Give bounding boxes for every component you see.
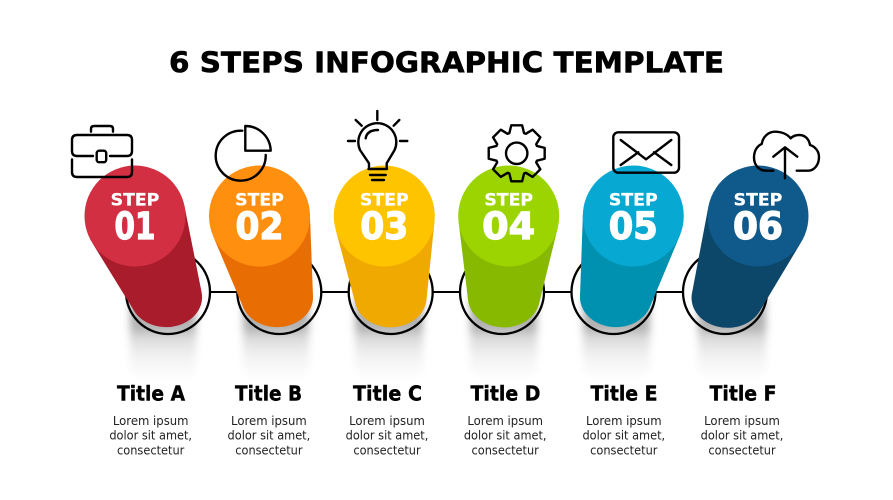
cylinder top 6: [708, 166, 808, 266]
icon: light bulb: [348, 111, 407, 180]
description E: consectetur: [590, 442, 658, 458]
description D: dolor sit amet,: [464, 428, 547, 442]
title F: Title F: [710, 382, 776, 406]
description C: [346, 413, 428, 458]
description C: consectetur: [353, 442, 421, 458]
title A: Title A: [117, 382, 185, 406]
ring 6: [683, 250, 767, 334]
description B: [228, 413, 310, 458]
shadow 1: [130, 290, 196, 380]
ring 2: [237, 250, 321, 334]
description F: Lorem ipsum: [704, 413, 780, 428]
icon: gear: [489, 125, 545, 181]
cylinder top 5: [583, 166, 684, 266]
description A: consectetur: [117, 442, 185, 458]
step 2: [209, 126, 321, 458]
description D: [464, 413, 547, 458]
cylinder body 5: [580, 214, 680, 327]
description B: dolor sit amet,: [228, 428, 310, 442]
shadow 3: [355, 290, 423, 380]
description E: Lorem ipsum: [586, 413, 662, 428]
step number 5: 05: [609, 205, 658, 248]
icon: envelope: [613, 132, 679, 173]
ring 3: [349, 250, 433, 334]
step number 3: 03: [360, 205, 408, 248]
cylinder top 2: [209, 166, 310, 266]
cylinder top 4: [458, 166, 559, 266]
title B: Title B: [235, 382, 302, 406]
description F: consectetur: [708, 442, 776, 458]
step label 5: STEP: [609, 191, 658, 210]
ring 4: [460, 250, 544, 334]
cylinder body 4: [459, 223, 558, 327]
description C: Lorem ipsum: [349, 413, 425, 428]
icon: pie chart: [216, 126, 271, 181]
step label 6: STEP: [734, 191, 782, 210]
description B: Lorem ipsum: [231, 413, 307, 428]
description E: dolor sit amet,: [582, 428, 665, 442]
step number 2: 02: [236, 205, 284, 248]
step label 4: STEP: [484, 191, 533, 210]
step number 6: 06: [733, 205, 783, 248]
description A: Lorem ipsum: [113, 413, 189, 428]
cylinder body 2: [213, 214, 313, 327]
shadow 5: [583, 290, 650, 380]
step number 4: 04: [482, 205, 535, 248]
cylinder body 6: [692, 206, 801, 328]
icon: briefcase: [72, 126, 132, 177]
shadow 4: [470, 290, 537, 380]
step 5: [572, 132, 684, 458]
title D: Title D: [470, 382, 540, 406]
description A: dolor sit amet,: [109, 428, 192, 442]
description B: consectetur: [235, 442, 303, 458]
step 3: [334, 111, 435, 458]
cylinder top 1: [84, 166, 186, 266]
description F: [701, 413, 783, 458]
title C: Title C: [353, 382, 422, 406]
title: 6 STEPS INFOGRAPHIC TEMPLATE: [169, 46, 724, 80]
ring 1: [126, 250, 210, 334]
step 4: [458, 125, 559, 458]
title E: Title E: [590, 382, 658, 406]
icon: cloud upload: [754, 132, 819, 178]
description A: [109, 413, 192, 458]
ring 5: [572, 250, 656, 334]
cylinder body 1: [92, 205, 202, 327]
connector line: [210, 291, 683, 293]
shadow 6: [698, 290, 766, 380]
description F: dolor sit amet,: [701, 428, 783, 442]
description D: Lorem ipsum: [467, 413, 543, 428]
step label 3: STEP: [360, 191, 409, 210]
step label 1: STEP: [111, 191, 159, 210]
step 1: [72, 126, 210, 458]
description D: consectetur: [472, 442, 540, 458]
step number 1: 01: [114, 205, 156, 248]
step 6: [683, 132, 819, 457]
shadow 2: [243, 290, 309, 380]
description E: [582, 413, 665, 458]
cylinder top 3: [334, 166, 435, 266]
cylinder body 3: [336, 222, 434, 327]
description C: dolor sit amet,: [346, 428, 428, 442]
step label 2: STEP: [235, 191, 284, 210]
